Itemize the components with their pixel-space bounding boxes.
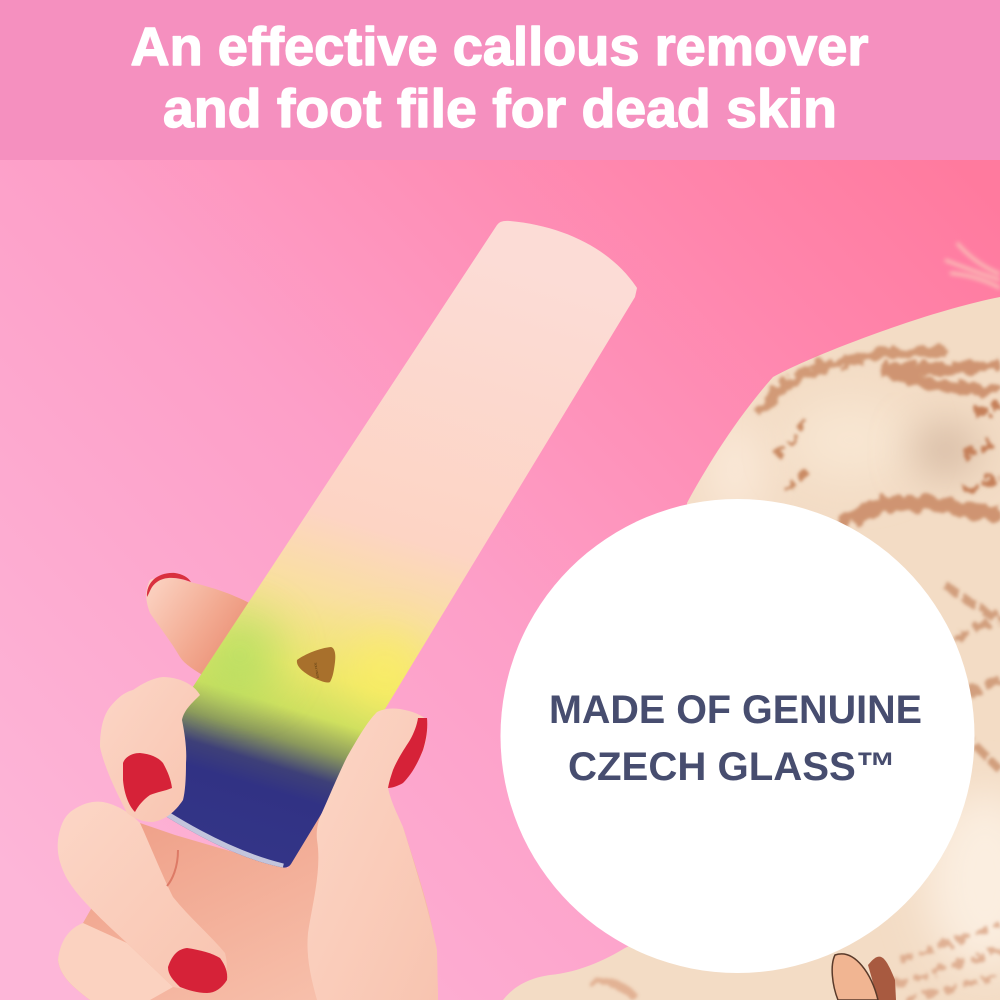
thumb nail — [388, 718, 427, 788]
palm crease — [167, 850, 178, 886]
palm — [58, 815, 438, 1000]
middle fingernail — [123, 753, 172, 812]
title: and foot file for dead skin — [163, 79, 837, 139]
callout text: MADE OF GENUINE — [549, 688, 922, 732]
middle finger — [100, 677, 200, 822]
hand behind file — [58, 573, 438, 1000]
index fingernail — [147, 573, 191, 597]
label sticker: BONA FIDE — [313, 662, 320, 679]
title: An effective callous remover — [130, 17, 868, 77]
white circle callout — [500, 499, 974, 973]
fingers in front of file — [58, 677, 438, 1000]
ring fingernail — [168, 948, 227, 993]
label sticker — [297, 647, 335, 683]
knitted sweater — [503, 243, 1000, 1000]
little finger — [58, 923, 173, 1000]
index finger — [146, 577, 260, 678]
title banner — [0, 0, 1000, 160]
wooden button — [832, 954, 878, 1000]
callout text: CZECH GLASS™ — [568, 745, 896, 789]
ring finger — [58, 802, 227, 993]
thumb — [307, 708, 438, 1000]
glass foot file — [125, 221, 637, 868]
